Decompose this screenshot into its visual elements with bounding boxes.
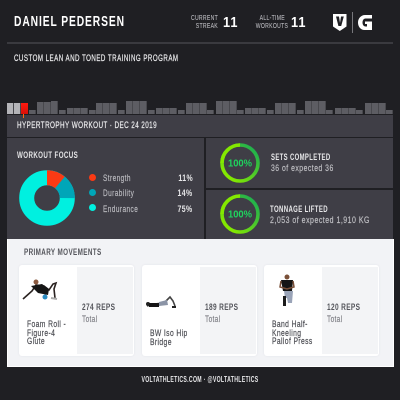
workout title bar [7, 115, 393, 137]
name: hip bridge [150, 328, 188, 348]
legend marker: strength [88, 174, 96, 181]
name: pallof press: Pallof Press [272, 336, 313, 347]
program title: CUSTOM LEAN AND TONED TRAINING PROGRAM [14, 53, 179, 64]
panel: workout focus [7, 138, 204, 239]
name: foam roll [27, 319, 66, 347]
icon: gatorade G logo [358, 15, 372, 30]
reps: hip bridge: 189 REPS [205, 302, 238, 313]
progress ring: sets [220, 143, 260, 183]
legend value: endurance: 75% [178, 204, 193, 214]
current workout marker [23, 114, 24, 118]
panel: sets completed [206, 138, 393, 188]
total label: foam roll: Total [82, 314, 97, 324]
panel: primary movements [7, 239, 394, 367]
card: pallof press [264, 265, 379, 356]
current streak label: CURRENT [191, 15, 218, 22]
card stats background [200, 267, 256, 354]
donut chart [19, 170, 75, 226]
icon: volt shield logo [333, 14, 346, 31]
figure: foam roll [22, 280, 58, 300]
all-time workouts label: ALL-TIME [260, 15, 285, 22]
legend label: durability: Durability [103, 188, 134, 198]
current streak value: 11 [223, 14, 239, 31]
name: hip bridge: Bridge [150, 337, 172, 348]
legend label: strength: Strength [103, 172, 131, 182]
workout title: HYPERTROPHY WORKOUT · DEC 24 2019 [17, 120, 157, 131]
progress ring: tonnage [220, 194, 260, 234]
reps: foam roll: 274 REPS [82, 302, 115, 313]
legend value: strength: 11% [178, 172, 193, 182]
detail: sets: 36 of expected 36 [271, 163, 334, 173]
total label: hip bridge: Total [205, 314, 220, 324]
current streak label: STREAK [196, 22, 218, 30]
all-time workouts label: WORKOUTS [256, 22, 288, 30]
heading: primary movements: PRIMARY MOVEMENTS [24, 246, 102, 256]
figure: hip bridge [146, 296, 176, 308]
card stats background [322, 267, 378, 354]
heading: sets completed: SETS COMPLETED [271, 152, 331, 162]
logo divider [352, 12, 353, 33]
legend marker: endurance [88, 204, 96, 211]
footer text: VOLTATHLETICS.COM · @VOLTATHLETICS [141, 374, 259, 384]
reps: pallof press: 120 REPS [327, 302, 360, 313]
detail: tonnage: 2,053 of expected 1,910 KG [270, 215, 370, 225]
card: iso hip bridge [142, 265, 257, 356]
all-time workouts label [256, 15, 288, 30]
stats: foam roll [82, 302, 115, 324]
all-time workouts value: 11 [290, 14, 306, 31]
figure: pallof press [279, 274, 295, 306]
total label: pallof press: Total [327, 314, 342, 324]
athlete name: DANIEL PEDERSEN [14, 14, 125, 30]
legend label: endurance: Endurance [103, 204, 138, 214]
heading: workout focus: WORKOUT FOCUS [17, 150, 78, 160]
progress ring: sets: 100% [228, 158, 253, 170]
card stats background [77, 267, 133, 354]
current streak label [191, 15, 218, 30]
name: foam roll: Glute [27, 336, 45, 347]
progress ring: tonnage: 100% [228, 208, 253, 220]
stats: pallof press [327, 302, 360, 324]
name: pallof press: Band Half- [272, 319, 308, 330]
panel: tonnage lifted [206, 190, 393, 239]
name: foam roll: Figure-4 [27, 328, 55, 339]
legend value: durability: 14% [178, 188, 193, 198]
card: foam roll [19, 265, 134, 356]
name: foam roll: Foam Roll - [27, 319, 66, 330]
name: hip bridge: BW Iso Hip [150, 328, 188, 339]
name: pallof press [272, 319, 313, 347]
name: pallof press: Kneeling [272, 328, 301, 339]
legend marker: durability [88, 189, 96, 196]
stats: hip bridge [205, 302, 238, 324]
heading: tonnage lifted: TONNAGE LIFTED [270, 204, 328, 214]
header divider [7, 42, 393, 44]
